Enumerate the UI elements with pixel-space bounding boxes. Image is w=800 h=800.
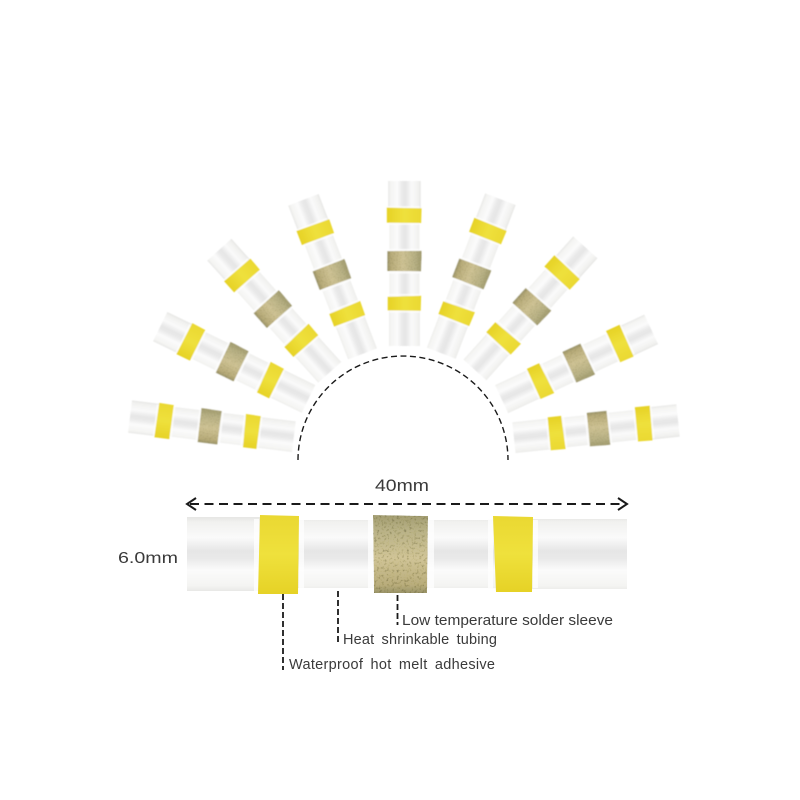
connector fan <box>128 181 680 455</box>
connector 8 <box>494 313 658 415</box>
large connector <box>187 515 627 594</box>
length dimension arrow <box>187 498 627 510</box>
connector 2 <box>152 311 316 415</box>
connector 5 <box>387 181 422 346</box>
connector 6 <box>425 193 516 359</box>
diameter label: 6.0mm <box>118 550 178 567</box>
connector 7 <box>462 236 598 381</box>
connector 1 <box>128 400 296 454</box>
connector 3 <box>206 238 342 384</box>
waterproof adhesive ring left <box>258 515 299 594</box>
connector 4 <box>287 194 379 360</box>
solder sleeve <box>373 515 428 593</box>
waterproof adhesive ring right <box>493 516 533 592</box>
length label: 40mm <box>375 477 429 495</box>
callout: solder sleeve: Low temperature solder sleeve <box>402 613 613 629</box>
band highlights <box>254 519 538 591</box>
connector 9 <box>512 403 680 455</box>
callout: heat shrink tubing: Heat shrinkable tubing <box>343 632 497 648</box>
callout: hot melt adhesive: Waterproof hot melt adhesive <box>289 657 495 673</box>
heat shrink tube body <box>187 517 627 591</box>
dashed semicircle arc <box>298 356 508 460</box>
